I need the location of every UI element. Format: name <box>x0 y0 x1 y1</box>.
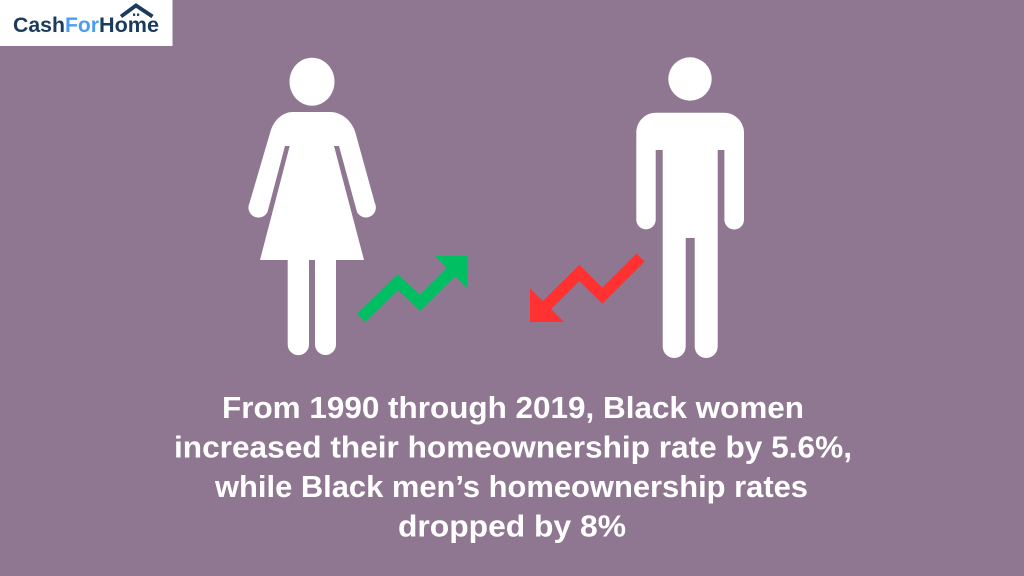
logo wordmark <box>13 14 159 37</box>
icon: woman <box>248 58 376 355</box>
caption text: while Black men’s homeownership rates <box>214 469 808 504</box>
caption text <box>174 390 852 544</box>
logo: CashForHome <box>0 0 172 46</box>
caption text: increased their homeownership rate by 5.6%, <box>174 430 852 464</box>
arrow: red downward trend <box>530 258 641 322</box>
icon: man <box>636 57 744 358</box>
arrow: green upward trend <box>361 256 467 318</box>
logo wordmark: For <box>65 14 99 37</box>
caption text: From 1990 through 2019, Black women <box>222 390 804 425</box>
logo roof icon <box>121 6 152 16</box>
logo wordmark: Home <box>99 14 159 37</box>
logo wordmark: Cash <box>13 14 65 37</box>
caption text: dropped by 8% <box>398 508 626 544</box>
